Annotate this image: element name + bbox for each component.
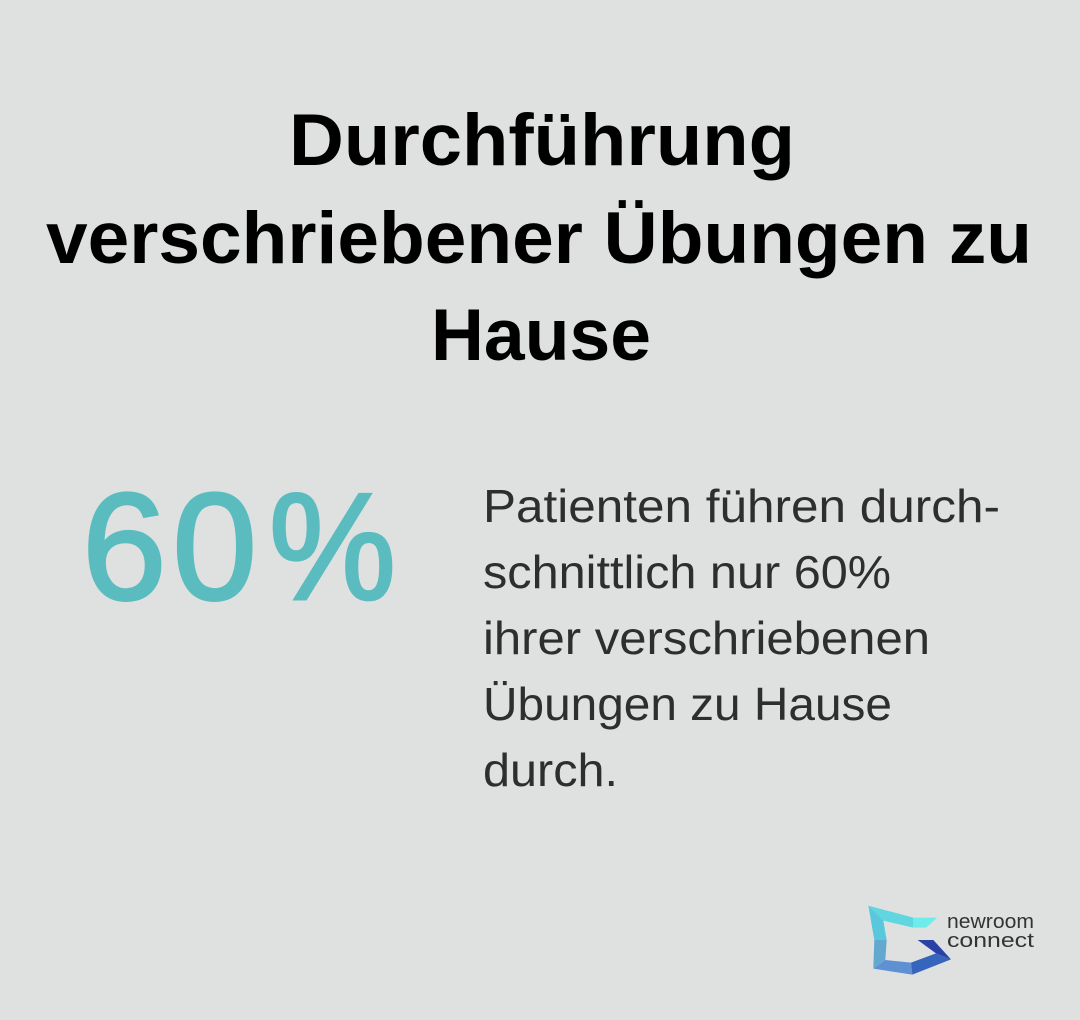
logo wordmark: newroom [947, 911, 1034, 933]
title: Durchführung [289, 100, 795, 181]
description text: durch. [483, 744, 618, 796]
title: verschriebener Übungen zu [46, 198, 1032, 279]
statistic: 60%: 60 [82, 462, 257, 632]
title [46, 100, 1032, 376]
statistic: 60% [82, 462, 396, 632]
description text: ihrer verschriebenen [483, 612, 930, 664]
icon: logo mark [868, 906, 951, 975]
logo wordmark [947, 911, 1035, 952]
statistic: 60%: % [269, 462, 396, 632]
description text: Patienten führen durch- [483, 480, 1000, 532]
title: Hause [431, 295, 651, 376]
description text: schnittlich nur 60% [483, 546, 891, 598]
description text [483, 480, 1000, 796]
description text: Übungen zu Hause [483, 678, 892, 730]
logo: newroom connect [868, 906, 1035, 975]
logo wordmark: connect [947, 930, 1035, 952]
